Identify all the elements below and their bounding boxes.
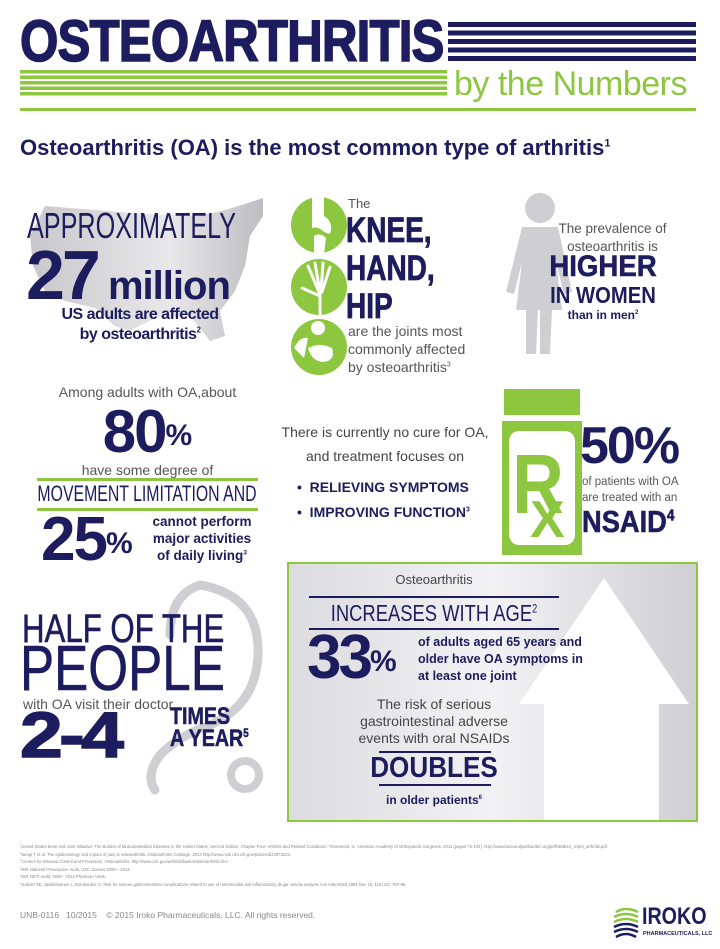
panel: women: IN WOMEN: [550, 282, 656, 308]
text: approximately: APPROXIMATELY: [27, 205, 236, 246]
icon: rx bottle: R: [512, 436, 564, 531]
panel: age: The risk of serious: [377, 696, 491, 712]
icon: US map: [30, 198, 263, 341]
panel: treatment: and treatment focuses on: [306, 448, 464, 464]
panel: treatment: • RELIEVING SYMPTOMS: [297, 479, 469, 495]
logo: iroko: [614, 903, 712, 938]
stat: 2-4 times a year: 2-4: [20, 699, 120, 771]
panel: doctor visits: PEOPLE: [20, 632, 225, 704]
panel: women: HIGHER: [549, 250, 657, 283]
panel: age: DOUBLES: [370, 752, 498, 784]
panel: 80% and 25%: MOVEMENT LIMITATION AND: [37, 481, 257, 506]
logo: iroko: PHARMACEUTICALS, LLC: [643, 931, 712, 937]
subtitle: by the Numbers: by the Numbers: [454, 65, 687, 103]
panel: joints: [291, 196, 465, 375]
panel: 80% and 25%: cannot perform: [152, 514, 252, 529]
panel: age: events with oral NSAIDs: [359, 730, 509, 746]
footnotes: 2Neogi T et al. The epidemiology and impact of pain in osteoarthritis. Osteoarthritis Cartilage, 2013 http://www.ncbi.nlm.nih.gov/pubmed/23973124.: [20, 852, 291, 857]
icon: hip: [291, 319, 347, 375]
text: US adults: US adults are affected: [61, 306, 219, 323]
icon: hand: [291, 259, 347, 315]
panel: women: osteoarthritis is: [567, 239, 658, 254]
footnotes: 3Centers for Disease Control and Prevention. Osteoarthritis. http://www.cdc.gov/arthritis/basics/osteoarthritis.htm.: [20, 859, 229, 864]
panel: 50% NSAID: 50%: [580, 417, 678, 475]
panel: doctor visits: [20, 580, 263, 794]
stat: 25%: 25%: [41, 505, 133, 574]
panel: age: older have OA symptoms in: [418, 652, 583, 666]
footnotes: 6Gabriel SE, Jaakkimainen L, Bombardier C. Risk for serious gastrointestinal complications related to use of nonsteroidal anti-inflammatory drugs: ameta-analysis.Ann InternMed 1991 Nov 15; 115 (10): 787-96.: [20, 882, 406, 887]
panel: age: [287, 562, 698, 822]
panel: 50% NSAID: NSAID4: [582, 504, 674, 539]
panel: doctor visits: A YEAR5: [170, 725, 249, 752]
panel: joints: HAND,: [346, 249, 435, 288]
title: OSTEOARTHRITIS: [20, 9, 444, 74]
panel: doctor visits: TIMES: [170, 703, 230, 730]
panel: treatment: • IMPROVING FUNCTION3: [297, 504, 470, 520]
panel: women: than in men2: [568, 308, 638, 322]
panel: joints: commonly affected: [348, 341, 465, 357]
green stripes: [20, 70, 447, 96]
panel: age: of adults aged 65 years and: [418, 635, 582, 649]
footnotes: 1United States Bone and Joint Initiative: The Burden of Musculoskeletal Diseases in the United States, Second Edition. Chapter Four: Arthritis and Related Conditions." Rosemont, IL: American Academy of Orthopaedic Surgeons, 2011 (pages 76-102). http://www.boneandjointburden.org/pdfs/BMUS_chpt4_arthritis.pdf.: [20, 844, 608, 849]
panel: 80% and 25%: have some degree of: [82, 462, 213, 478]
text: of daily living3: [157, 548, 247, 563]
stat: 80%: 80%: [103, 398, 192, 465]
icon: woman figure: [506, 193, 572, 354]
panel: women: [506, 193, 667, 354]
panel: age: in older patients6: [386, 793, 482, 807]
panel: treatment: There is currently no cure for OA,: [282, 424, 488, 440]
headline: Osteoarthritis (OA) is the most common type of arthritis1: [20, 135, 610, 160]
text: US adults: by osteoarthritis2: [80, 326, 200, 343]
panel: doctor visits: HALF OF THE: [22, 607, 224, 651]
panel: doctor visits: with OA visit their doctor: [23, 696, 173, 712]
text: US adults: [61, 306, 219, 343]
navy stripes: [448, 22, 696, 61]
panel: 80% and 25%: Among adults with OA,about: [59, 384, 236, 400]
icon: up arrow: [519, 578, 689, 820]
icon: stethoscope: [146, 580, 263, 794]
icon: knee: [291, 197, 347, 253]
stat: 27 million: 27 million: [26, 236, 230, 314]
footnotes: 5IMS NDTI Audit, 2008 - 2014 Physician Visits.: [20, 874, 106, 879]
panel: joints: by osteoarthritis3: [348, 359, 451, 375]
panel: 50% NSAID: [580, 417, 679, 539]
panel: age: at least one joint: [418, 669, 517, 683]
panel: joints: KNEE,: [346, 211, 432, 250]
panel: age: Osteoarthritis: [395, 572, 473, 587]
text: the knee hand hip: The: [348, 196, 370, 211]
stat: 33%: 33%: [307, 623, 397, 692]
footer: UNB-0116 10/2015 © 2015 Iroko Pharmaceuticals, LLC. All rights reserved.: [20, 910, 315, 920]
footnotes: [20, 844, 608, 887]
panel: 27 million: [26, 198, 263, 343]
icon: rx bottle: [502, 389, 582, 555]
panel: 80% and 25%: major activities: [153, 531, 251, 546]
panel: age: INCREASES WITH AGE2: [331, 600, 537, 626]
panel: women: The prevalence of: [558, 221, 667, 236]
icon: rx bottle: X: [530, 491, 565, 549]
panel: 80% and 25%: [37, 384, 258, 574]
footnotes: 4IMS National Prescription Audit, USC classes 2008 – 2014.: [20, 867, 131, 872]
panel: joints: are the joints most: [348, 323, 462, 339]
logo: iroko: IROKO: [642, 903, 707, 930]
panel: 50% NSAID: of patients with OA: [582, 476, 679, 488]
panel: treatment: [282, 424, 488, 520]
panel: joints: HIP: [346, 287, 393, 326]
panel: 50% NSAID: are treated with an: [582, 492, 677, 504]
panel: age: gastrointestinal adverse: [360, 713, 508, 729]
